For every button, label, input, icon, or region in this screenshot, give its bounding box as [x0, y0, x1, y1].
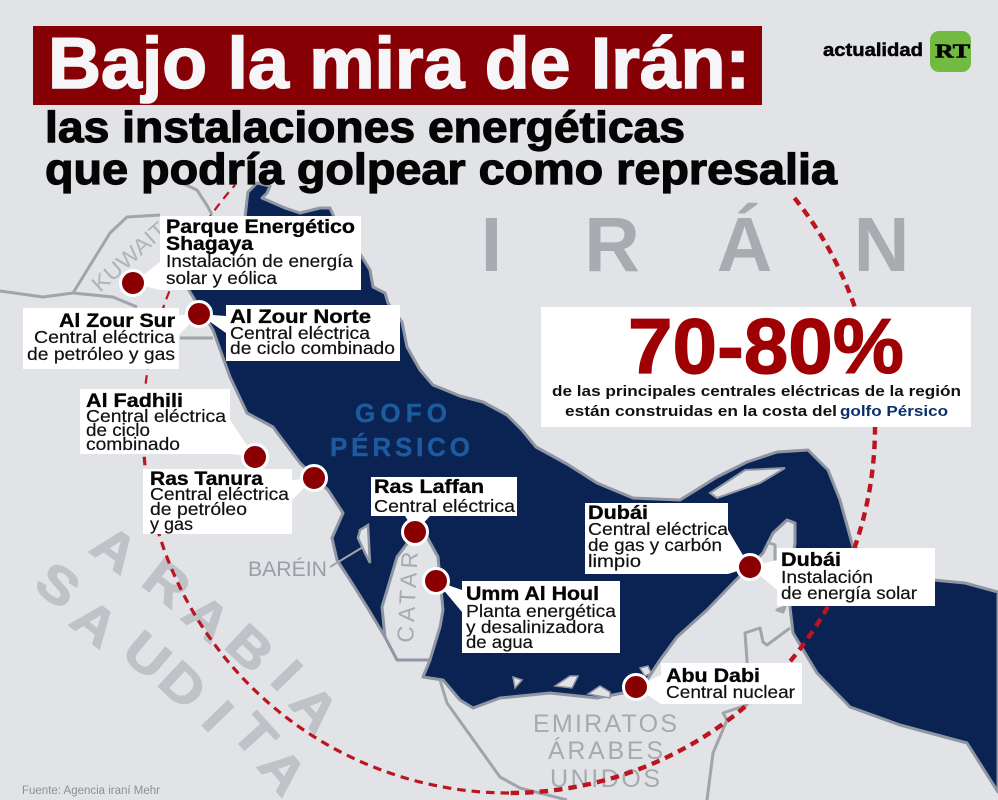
country label: Irán: I	[481, 202, 502, 288]
country label: Saudita: T	[221, 702, 289, 768]
country label: Irán: Á	[717, 201, 772, 288]
logo: actualidad RT: actualidad	[823, 40, 923, 60]
country label: Emiratos Árabes Unidos: UNIDOS	[550, 765, 660, 793]
callout: Parque Energético Shagaya	[133, 216, 361, 290]
callout: Al Zour Norte	[199, 305, 400, 361]
country label: Irán	[481, 201, 909, 288]
country label: Saudita	[25, 550, 319, 800]
logo: actualidad RT	[823, 31, 971, 72]
callout: Parque Energético Shagaya: solar y eólica	[166, 268, 277, 288]
country label: Kuwait: KUWAIT	[87, 217, 172, 297]
callout: Parque Energético Shagaya: Instalación de energía	[166, 251, 353, 271]
callout: Al Zour Sur: de petróleo y gas	[27, 344, 175, 364]
country label: Saudita: U	[112, 619, 182, 691]
title banner: Bajo la mira de Irán:	[48, 24, 750, 104]
map: land borders	[0, 183, 790, 800]
location markers	[120, 270, 762, 700]
country label: Irán: R	[584, 202, 640, 288]
callout: Dubái solar: Dubái	[781, 549, 841, 571]
subtitle: que podría golpear como represalia	[45, 145, 838, 194]
callout: Al Fadhili	[80, 389, 255, 457]
callout: Parque Energético Shagaya: Shagaya	[166, 233, 253, 255]
callout: Al Zour Sur: Al Zour Sur	[59, 310, 175, 332]
callout: Dubái gas: Dubái	[588, 502, 648, 524]
callout: Ras Laffan: Ras Laffan	[374, 476, 484, 498]
statistic panel: están construidas en la costa del	[565, 403, 837, 420]
callout: Al Zour Norte: de ciclo combinado	[230, 338, 395, 358]
callout: Al Zour Sur: Central eléctrica	[34, 327, 175, 347]
callout: Al Fadhili: Central eléctrica	[86, 406, 226, 426]
country label: Saudita: A	[60, 587, 129, 659]
country label: Arabia: B	[215, 612, 285, 684]
country label: Baréin: BARÉIN	[248, 558, 327, 581]
callout: Abu Dabi: Central nuclear	[666, 682, 795, 702]
callout: Dubái gas: limpio	[588, 551, 641, 571]
country label: Arabia: A	[81, 513, 149, 585]
country label: Catar: CATAR	[392, 551, 423, 643]
sea label: Golfo Pérsico: GOFO	[355, 398, 447, 428]
callout: Dubái gas	[585, 502, 750, 574]
callout: Umm Al Houl: de agua	[466, 632, 533, 652]
sea label: Golfo Pérsico: PÉRSICO	[330, 432, 470, 462]
country label: Emiratos Árabes Unidos	[533, 710, 677, 793]
callout: Al Fadhili: Al Fadhili	[86, 390, 183, 412]
country label: Saudita: I	[191, 690, 245, 742]
subtitle	[45, 103, 838, 194]
callout: Al Fadhili: combinado	[86, 434, 180, 454]
country label: Arabia: R	[132, 547, 201, 619]
statistic panel: golfo Pérsico	[840, 403, 948, 420]
country label: Arabia: I	[260, 649, 314, 701]
callout: Ras Laffan	[371, 476, 517, 532]
callout: Dubái gas: Central eléctrica	[588, 519, 728, 539]
statistic panel: de las principales centrales eléctricas de la región	[552, 383, 961, 400]
callout: Abu Dabi: Abu Dabi	[666, 665, 760, 687]
statistic panel	[541, 302, 971, 427]
sea label: Golfo Pérsico	[330, 398, 470, 462]
country label: Arabia: A	[172, 582, 242, 654]
country label: Arabia: A	[279, 673, 351, 743]
callout: Ras Tanura: y gas	[150, 514, 193, 534]
callout: Ras Tanura	[143, 468, 314, 534]
callout: Umm Al Houl: y desalinizadora	[466, 617, 604, 637]
callout: Dubái solar	[750, 548, 935, 606]
callout: Ras Laffan: Central eléctrica	[374, 496, 515, 516]
callout: Al Zour Norte: Al Zour Norte	[230, 306, 371, 328]
callout: Umm Al Houl: Umm Al Houl	[466, 583, 599, 605]
country label: Arabia	[81, 513, 351, 743]
callout: Al Zour Sur	[23, 308, 199, 369]
country label: Emiratos Árabes Unidos: EMIRATOS	[533, 710, 677, 738]
callout: Al Fadhili: de ciclo	[86, 420, 150, 440]
callout: Dubái gas: de gas y carbón	[588, 535, 722, 555]
country label: Emiratos Árabes Unidos: ÁRABES	[548, 736, 663, 765]
callout: Ras Tanura: de petróleo	[150, 499, 247, 519]
callout: Abu Dabi	[636, 663, 802, 704]
missile range circle	[143, 185, 875, 793]
map: Persian Gulf sea	[187, 183, 998, 792]
callout: Dubái solar: Instalación	[781, 567, 873, 587]
statistic panel: 70-80%	[628, 302, 904, 390]
source note: Fuente: Agencia iraní Mehr	[22, 785, 160, 797]
callout: Ras Tanura: Ras Tanura	[150, 468, 263, 490]
callout: Dubái solar: de energía solar	[781, 583, 917, 603]
callout: Umm Al Houl	[436, 581, 620, 653]
country label: Irán: N	[854, 202, 909, 288]
logo: actualidad RT: RT	[935, 40, 971, 62]
country label: Saudita: D	[148, 649, 218, 721]
callout: Ras Tanura: Central eléctrica	[150, 484, 289, 504]
callout: Al Zour Norte: Central eléctrica	[230, 323, 370, 343]
callout: Parque Energético Shagaya: Parque Energético	[166, 216, 355, 238]
country label: Saudita: S	[25, 550, 91, 620]
subtitle: las instalaciones energéticas	[45, 103, 685, 152]
callout: Umm Al Houl: Planta energética	[466, 601, 616, 621]
